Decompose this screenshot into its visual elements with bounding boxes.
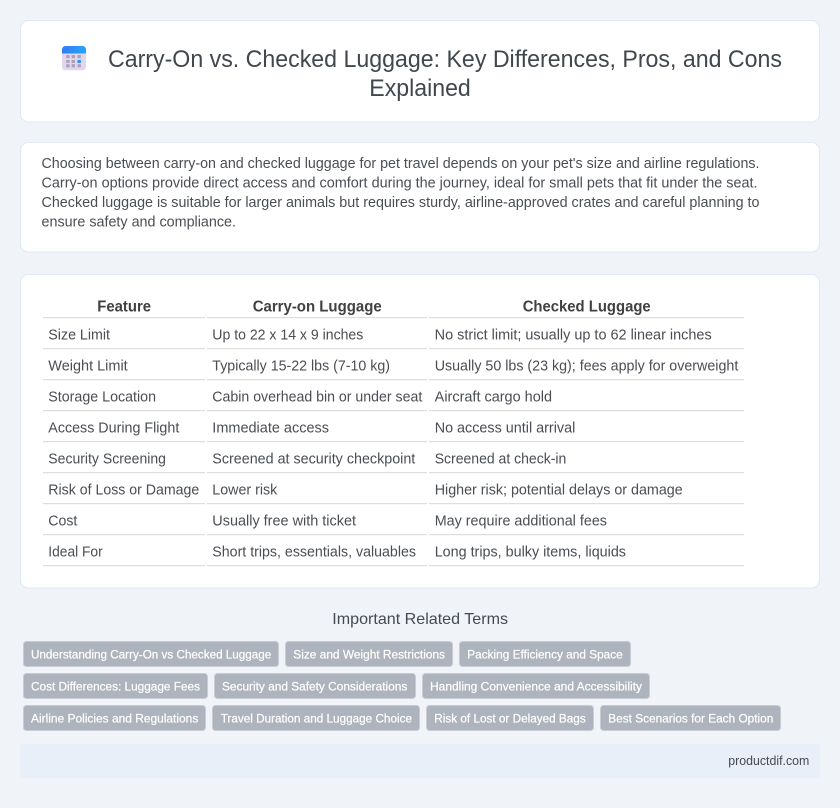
tag: handling	[422, 674, 650, 698]
heading: important related terms: Important Related Terms	[332, 611, 508, 628]
tag: handling: Handling Convenience and Accessibility	[430, 679, 643, 693]
table header row: Carry-on Luggage	[253, 299, 382, 316]
tag: understanding	[24, 642, 278, 666]
related term tags	[24, 642, 780, 730]
table row: security screening: Screened at check-in	[435, 451, 566, 467]
tag: size and weight	[286, 642, 452, 666]
tag: security	[214, 674, 416, 698]
table row: weight limit: Usually 50 lbs (23 kg); fees apply for overweight	[435, 358, 738, 374]
table row: security screening	[43, 451, 744, 473]
table row: storage location	[43, 389, 744, 411]
table row: ideal for: Long trips, bulky items, liquids	[435, 544, 626, 560]
table row: risk of loss or damage	[43, 482, 744, 504]
table row: access during flight: Immediate access	[212, 420, 329, 436]
tag: understanding: Understanding Carry-On vs Checked Luggage	[31, 647, 271, 661]
table row: weight limit	[43, 358, 744, 380]
tag: risk of lost: Risk of Lost or Delayed Bags	[434, 711, 586, 725]
footer: productdif.com	[728, 754, 809, 768]
table row: size limit	[43, 327, 744, 349]
tag: security: Security and Safety Considerations	[222, 679, 407, 693]
table row: risk of loss or damage: Risk of Loss or Damage	[48, 482, 199, 498]
panel: comparison table	[20, 274, 820, 588]
table row: access during flight	[43, 420, 744, 442]
table row: cost: Usually free with ticket	[212, 513, 356, 529]
table row: risk of loss or damage: Lower risk	[212, 482, 278, 498]
table row: security screening: Screened at security checkpoint	[212, 451, 415, 467]
tag: size and weight: Size and Weight Restrictions	[293, 647, 445, 661]
table header row: Feature	[97, 299, 151, 316]
panel: title header	[20, 20, 820, 122]
table row: security screening: Security Screening	[48, 451, 166, 467]
table row: size limit: Size Limit	[48, 327, 110, 343]
text block: introduction: ensure safety and compliance.	[42, 214, 236, 230]
table row: size limit: No strict limit; usually up to 62 linear inches	[435, 327, 712, 343]
title: Carry-On vs. Checked Luggage: Key Differences, Pros, and Cons	[108, 46, 782, 73]
title: Explained	[369, 75, 471, 102]
tag: cost differences: Cost Differences: Luggage Fees	[31, 679, 200, 693]
table row: storage location: Cabin overhead bin or under seat	[212, 389, 422, 405]
table row: cost: Cost	[48, 513, 77, 529]
tag: best scenarios: Best Scenarios for Each Option	[608, 711, 773, 725]
tag: travel duration	[212, 706, 420, 730]
table row: storage location: Aircraft cargo hold	[435, 389, 552, 405]
table header row	[43, 299, 744, 318]
table row: cost: May require additional fees	[435, 513, 607, 529]
table row: weight limit: Typically 15-22 lbs (7-10 kg)	[212, 358, 390, 374]
table row: ideal for	[43, 544, 744, 566]
table row: access during flight: No access until arrival	[435, 420, 575, 436]
tag: cost differences	[24, 674, 208, 698]
text block: introduction: Carry-on options provide direct access and comfort during the journey, ideal for small pets that fit under the seat.	[42, 176, 757, 192]
table row: risk of loss or damage: Higher risk; potential delays or damage	[435, 482, 683, 498]
table row: weight limit: Weight Limit	[48, 358, 128, 374]
table row: ideal for: Ideal For	[48, 544, 103, 560]
tag: packing	[460, 642, 630, 666]
table row: cost	[43, 513, 744, 535]
text block: introduction	[42, 156, 760, 230]
table row: access during flight: Access During Flight	[48, 420, 179, 436]
title	[108, 46, 782, 102]
tag: airline policies	[24, 706, 206, 730]
footer	[20, 744, 820, 778]
tag: packing: Packing Efficiency and Space	[467, 647, 623, 661]
text block: introduction: Checked luggage is suitable for larger animals but requires sturdy, airline-approved crates and careful planning to	[42, 195, 760, 211]
table header row: Checked Luggage	[523, 299, 651, 316]
table row: storage location: Storage Location	[48, 389, 156, 405]
table row: size limit: Up to 22 x 14 x 9 inches	[212, 327, 363, 343]
text block: introduction: Choosing between carry-on and checked luggage for pet travel depends on your pet's size and airline regulations.	[42, 156, 760, 172]
tag: airline policies: Airline Policies and Regulations	[31, 711, 198, 725]
icon: calendar	[62, 46, 86, 70]
tag: travel duration: Travel Duration and Luggage Choice	[221, 711, 412, 725]
panel: introduction paragraph	[20, 142, 820, 252]
table row: ideal for: Short trips, essentials, valuables	[212, 544, 416, 560]
tag: risk of lost	[426, 706, 594, 730]
tag: best scenarios	[600, 706, 780, 730]
